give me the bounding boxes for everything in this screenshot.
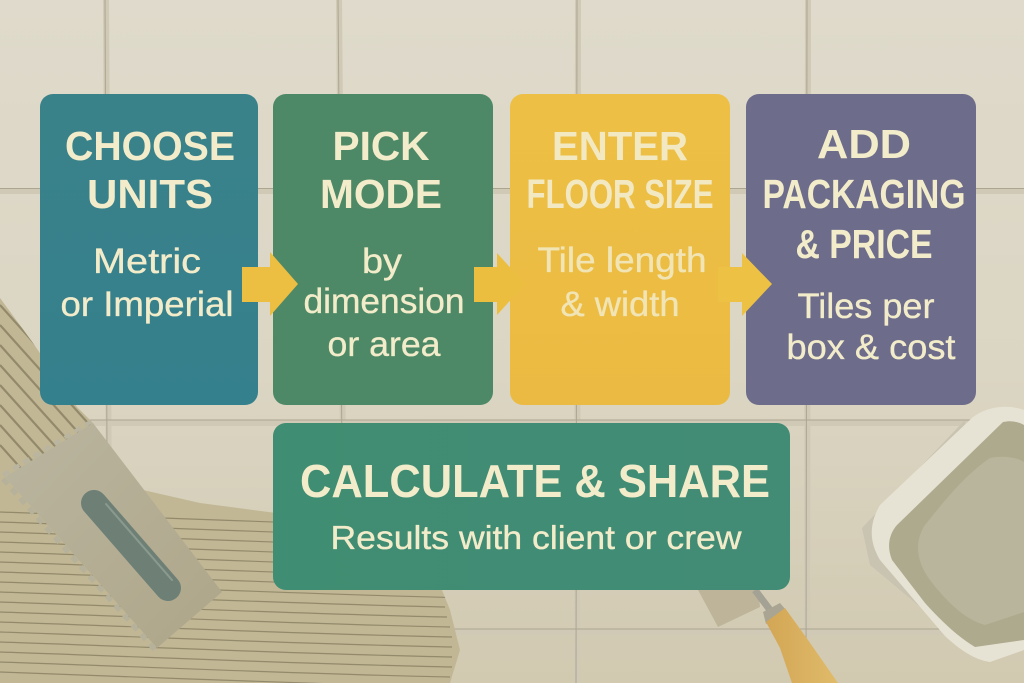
heading: pick mode	[320, 123, 442, 217]
text: by dimension or area	[304, 242, 464, 364]
panel: choose units	[40, 94, 258, 405]
arrow: mode to floor size	[474, 253, 525, 315]
text: metric or imperial: Metric	[93, 242, 201, 281]
heading: add packaging and price: ADD	[817, 121, 911, 167]
text: by dimension or area: or area	[328, 325, 441, 364]
text: results with client or crew: Results with client or crew	[330, 519, 742, 556]
arrow: floor size to packaging	[718, 253, 772, 316]
heading: pick mode: MODE	[320, 171, 442, 217]
heading: calculate and share: CALCULATE & SHARE	[300, 455, 770, 507]
notched trowel	[3, 421, 222, 650]
heading: choose units	[65, 123, 235, 217]
heading: add packaging and price	[762, 121, 966, 267]
text: tile length and width: Tile length	[538, 241, 706, 280]
text: metric or imperial	[60, 242, 233, 324]
heading: add packaging and price: & PRICE	[796, 221, 932, 267]
text: tile length and width: & width	[560, 285, 680, 324]
text: metric or imperial: or Imperial	[60, 285, 233, 324]
text: tiles per box and cost: box & cost	[786, 328, 956, 367]
heading: enter floor size	[526, 123, 714, 217]
heading: add packaging and price: PACKAGING	[762, 171, 966, 217]
heading: choose units: CHOOSE	[65, 123, 235, 169]
panel: pick mode	[273, 94, 493, 405]
adhesive with ridges	[0, 298, 470, 683]
heading: enter floor size: ENTER	[552, 123, 688, 169]
panel: enter floor size	[510, 94, 730, 405]
small trowel with wooden handle	[697, 588, 838, 683]
text: tiles per box and cost: Tiles per	[798, 287, 935, 326]
panel: calculate and share	[273, 423, 790, 590]
heading: choose units: UNITS	[87, 171, 213, 217]
arrow: units to mode	[242, 252, 298, 316]
trowel handle	[94, 503, 172, 588]
mixing tub with powder	[862, 407, 1024, 662]
heading: enter floor size: FLOOR SIZE	[526, 171, 714, 217]
panel: add packaging and price	[746, 94, 976, 405]
heading: pick mode: PICK	[332, 123, 430, 169]
text: tile length and width	[538, 241, 706, 324]
text: tiles per box and cost	[786, 287, 956, 367]
text: by dimension or area: by	[362, 242, 403, 281]
text: by dimension or area: dimension	[304, 282, 464, 321]
